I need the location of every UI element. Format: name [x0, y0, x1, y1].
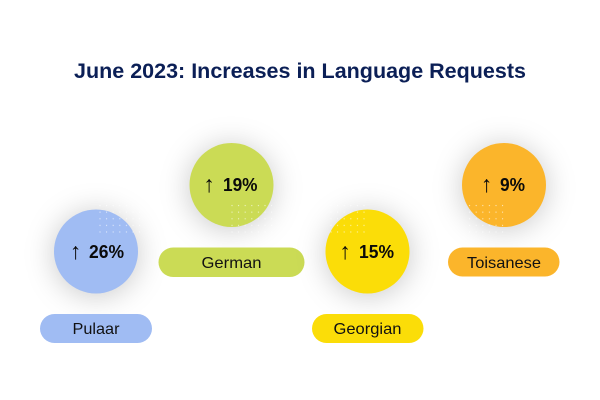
arrow: up: ↑ — [339, 238, 351, 264]
panel: Pulaar — [40, 202, 152, 343]
circle: Georgian 15% — [326, 210, 410, 294]
arrow: up: ↑ — [481, 171, 492, 197]
title: June 2023: Increases in Language Requests — [74, 60, 526, 83]
panel: Toisanese — [448, 143, 560, 276]
circle: German 19% — [190, 143, 274, 227]
circle: Toisanese 9% — [462, 143, 546, 227]
label: German: German — [202, 255, 262, 272]
value: 19%: 19% — [223, 175, 258, 195]
pill: Pulaar — [40, 314, 152, 343]
circle: Pulaar 26% — [54, 210, 138, 294]
arrow: up: ↑ — [203, 171, 215, 197]
label: Georgian: Georgian — [334, 321, 402, 338]
value: 9%: 9% — [500, 175, 525, 195]
pill: German — [158, 248, 304, 277]
label: Pulaar: Pulaar — [72, 321, 120, 338]
label: Toisanese: Toisanese — [467, 255, 541, 272]
arrow: up: ↑ — [70, 238, 81, 264]
value: 26%: 26% — [89, 242, 124, 262]
value: 15%: 15% — [359, 242, 394, 262]
panel: Georgian — [312, 202, 424, 343]
pill: Georgian — [312, 314, 424, 343]
pill: Toisanese — [448, 248, 560, 276]
panel: German — [158, 143, 304, 277]
